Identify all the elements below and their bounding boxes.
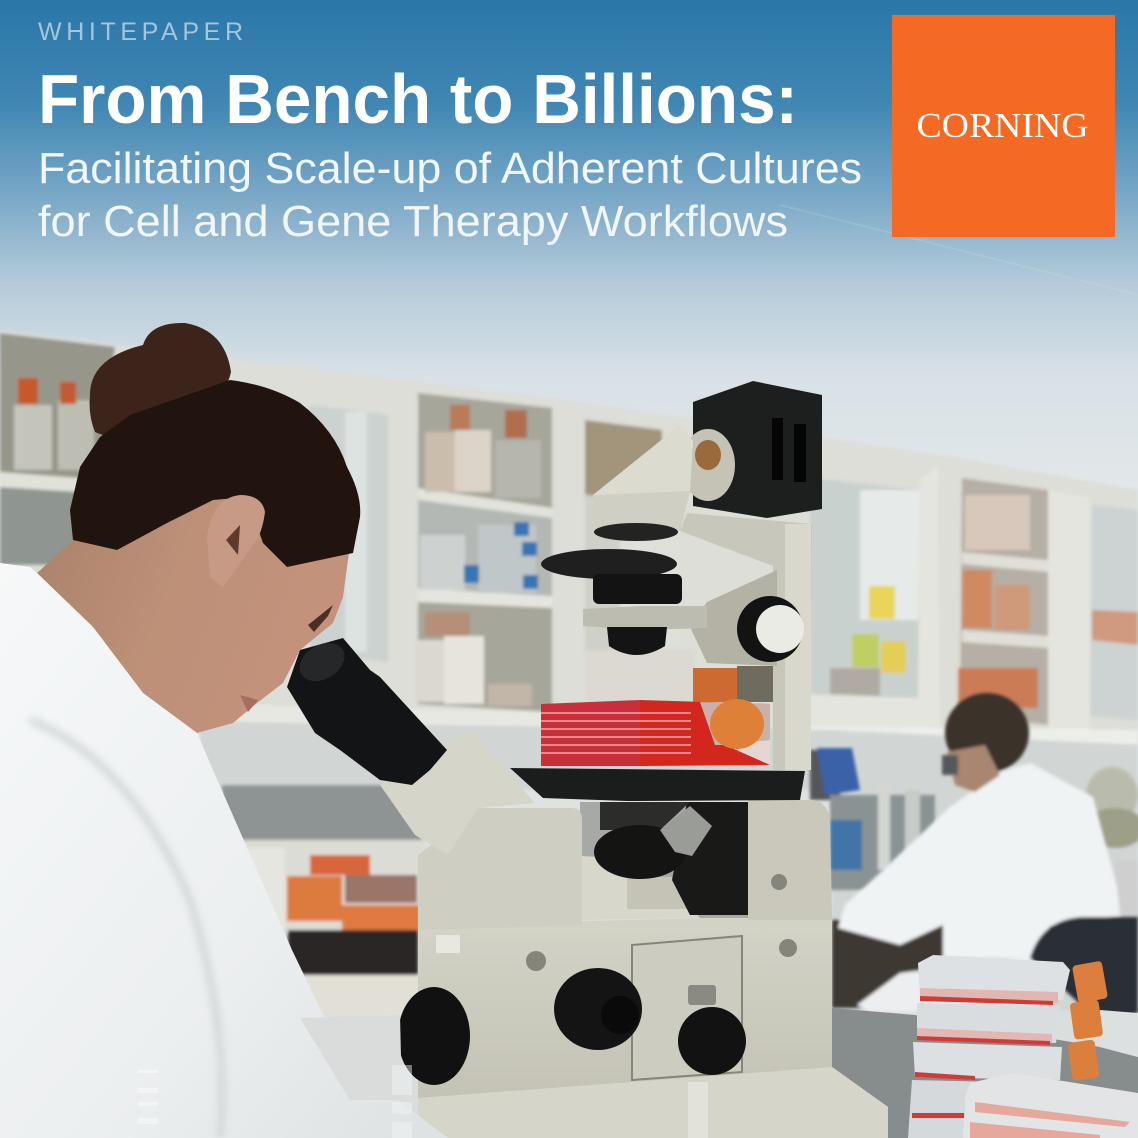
focus knob on arm <box>737 596 804 662</box>
hair <box>70 380 360 567</box>
far-left open shelf with bottles <box>0 333 115 565</box>
front flasks <box>963 1073 1138 1138</box>
black camera box <box>693 381 822 518</box>
inverted microscope <box>287 381 888 1138</box>
microscope body right <box>748 800 832 920</box>
illuminator column <box>680 513 812 770</box>
small screws and label on housing <box>436 874 797 971</box>
recess behind turret <box>580 802 750 918</box>
background: equipment on far bench <box>810 748 1138 920</box>
microscope body left <box>418 808 582 930</box>
beige support under turret <box>582 856 700 920</box>
scientist glasses <box>942 755 958 775</box>
eyebrow: whitepaper: WHITEPAPER <box>38 18 243 46</box>
subtitle: Facilitating Scale-up of Adherent Cultures <box>38 144 862 193</box>
white dashed marks at bottom <box>138 1065 708 1138</box>
lips <box>240 695 258 712</box>
top flask <box>918 955 1070 1005</box>
background: ceiling panel line <box>780 205 1138 295</box>
scientist desk <box>832 920 944 1008</box>
front panel <box>632 936 742 1080</box>
red culture flask stack on stage <box>541 699 770 766</box>
orange flask cap on stage <box>710 699 764 749</box>
eyepiece tube arm <box>380 730 535 855</box>
Corning logo box <box>892 15 1115 237</box>
orange tube and rods <box>693 668 737 702</box>
scientist head and hair <box>945 693 1029 773</box>
arm bracket <box>690 570 777 666</box>
title: From Bench to Billions: <box>38 60 798 138</box>
front control knobs <box>398 968 746 1085</box>
right open shelves with orange boxes <box>958 478 1048 725</box>
hair bun <box>90 323 231 440</box>
cabinet behind microscope <box>585 420 662 500</box>
coat shadow folds <box>30 720 222 1138</box>
second flask <box>917 1003 1060 1045</box>
orange flask caps <box>1067 961 1108 1081</box>
lab coat <box>0 563 448 1138</box>
subtitle: for Cell and Gene Therapy Workflows <box>38 197 788 246</box>
dark column behind objectives <box>672 802 748 915</box>
objective turret <box>594 825 686 879</box>
scientist lab coat <box>838 763 1120 958</box>
woman scientist at microscope <box>0 323 448 1138</box>
black binocular eyepieces <box>287 635 447 785</box>
stack of culture flasks, lower right <box>908 955 1138 1138</box>
right bench top <box>832 1008 1138 1138</box>
ear <box>207 495 265 587</box>
subtitle <box>38 144 862 246</box>
top lamp housing <box>593 425 735 541</box>
glass door with sticky notes <box>810 478 920 698</box>
Corning wordmark: CORNING <box>916 106 1088 145</box>
background scientist at far bench <box>832 693 1138 1020</box>
scientist legs <box>857 955 1040 1012</box>
glass cabinet door <box>310 405 388 662</box>
neck and face <box>37 490 350 733</box>
fourth flask <box>908 1080 1000 1138</box>
background: lower wall and back counter <box>200 722 1138 1017</box>
eyebrow and eye <box>308 605 333 632</box>
condenser disc and lens <box>541 549 707 655</box>
third flask <box>913 1042 1062 1080</box>
microscope base <box>418 915 888 1138</box>
background: lab cabinets and shelves <box>0 330 1138 745</box>
silver objective lens <box>660 806 712 856</box>
shelf rail under cabinets <box>225 705 552 730</box>
stage <box>510 768 805 801</box>
coat sleeve near knob <box>300 1015 402 1100</box>
middle open shelves with bottles <box>416 393 552 712</box>
scientist chair <box>1030 917 1138 1020</box>
